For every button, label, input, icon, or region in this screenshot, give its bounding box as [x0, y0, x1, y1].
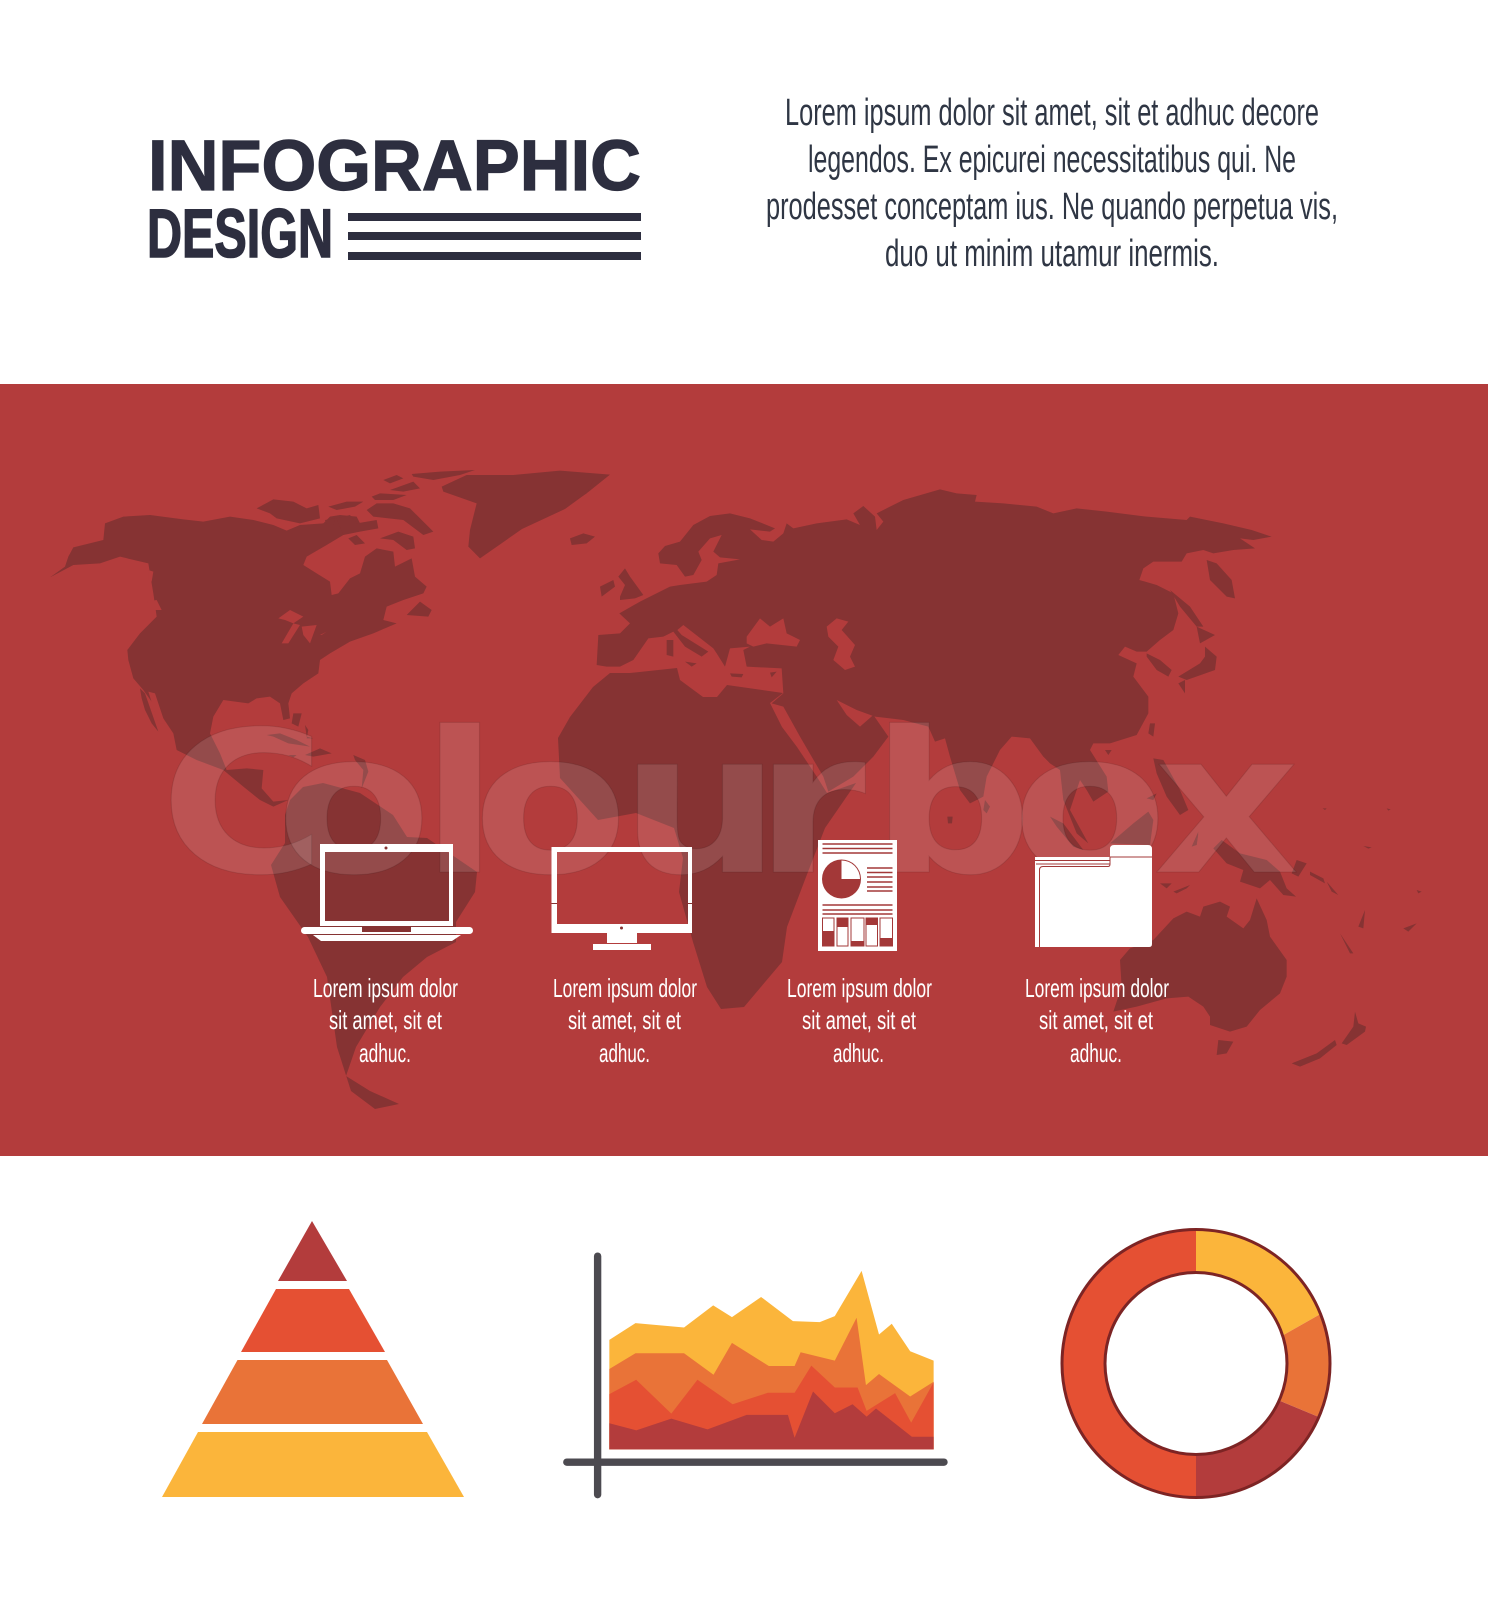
- icon: folder: [1035, 845, 1152, 947]
- label: laptop: [313, 973, 458, 1068]
- intro paragraph: duo ut minim utamur inermis.: [885, 233, 1219, 275]
- donut chart: [1062, 1230, 1330, 1498]
- title: infographic design: INFOGRAPHIC: [148, 127, 641, 206]
- label: report: Lorem ipsum dolor: [787, 973, 932, 1003]
- label: report: [787, 973, 932, 1068]
- label: laptop: sit amet, sit et: [329, 1005, 443, 1035]
- title: infographic design: [147, 127, 641, 272]
- label: report: adhuc.: [833, 1038, 884, 1068]
- title: infographic design: DESIGN: [147, 195, 333, 272]
- label: folder: sit amet, sit et: [1039, 1005, 1154, 1035]
- icon: report document: [818, 840, 897, 951]
- label: laptop: adhuc.: [359, 1038, 411, 1068]
- label: monitor: adhuc.: [599, 1038, 650, 1068]
- label: folder: Lorem ipsum dolor: [1025, 973, 1169, 1003]
- label: laptop: Lorem ipsum dolor: [313, 973, 458, 1003]
- icon: monitor: [552, 847, 692, 950]
- world map: [50, 470, 1422, 1109]
- south america: [271, 783, 477, 1109]
- pyramid chart: [162, 1221, 464, 1497]
- label: monitor: sit amet, sit et: [568, 1005, 682, 1035]
- label: report: sit amet, sit et: [802, 1005, 917, 1035]
- label: monitor: Lorem ipsum dolor: [553, 973, 697, 1003]
- panel: red world map band: [0, 384, 1488, 1156]
- label: monitor: [553, 973, 697, 1068]
- east asia islands: [947, 560, 1235, 850]
- icon: laptop: [301, 844, 473, 941]
- label: folder: [1025, 973, 1169, 1068]
- eurasia: [570, 480, 1272, 843]
- americas north and greenland: [50, 470, 610, 807]
- label: folder: adhuc.: [1070, 1038, 1122, 1068]
- intro paragraph: [766, 92, 1338, 275]
- africa: [558, 668, 856, 1009]
- area chart: [567, 1256, 944, 1495]
- oceania: [1113, 808, 1422, 1067]
- watermark: Colourbox: [160, 690, 1300, 919]
